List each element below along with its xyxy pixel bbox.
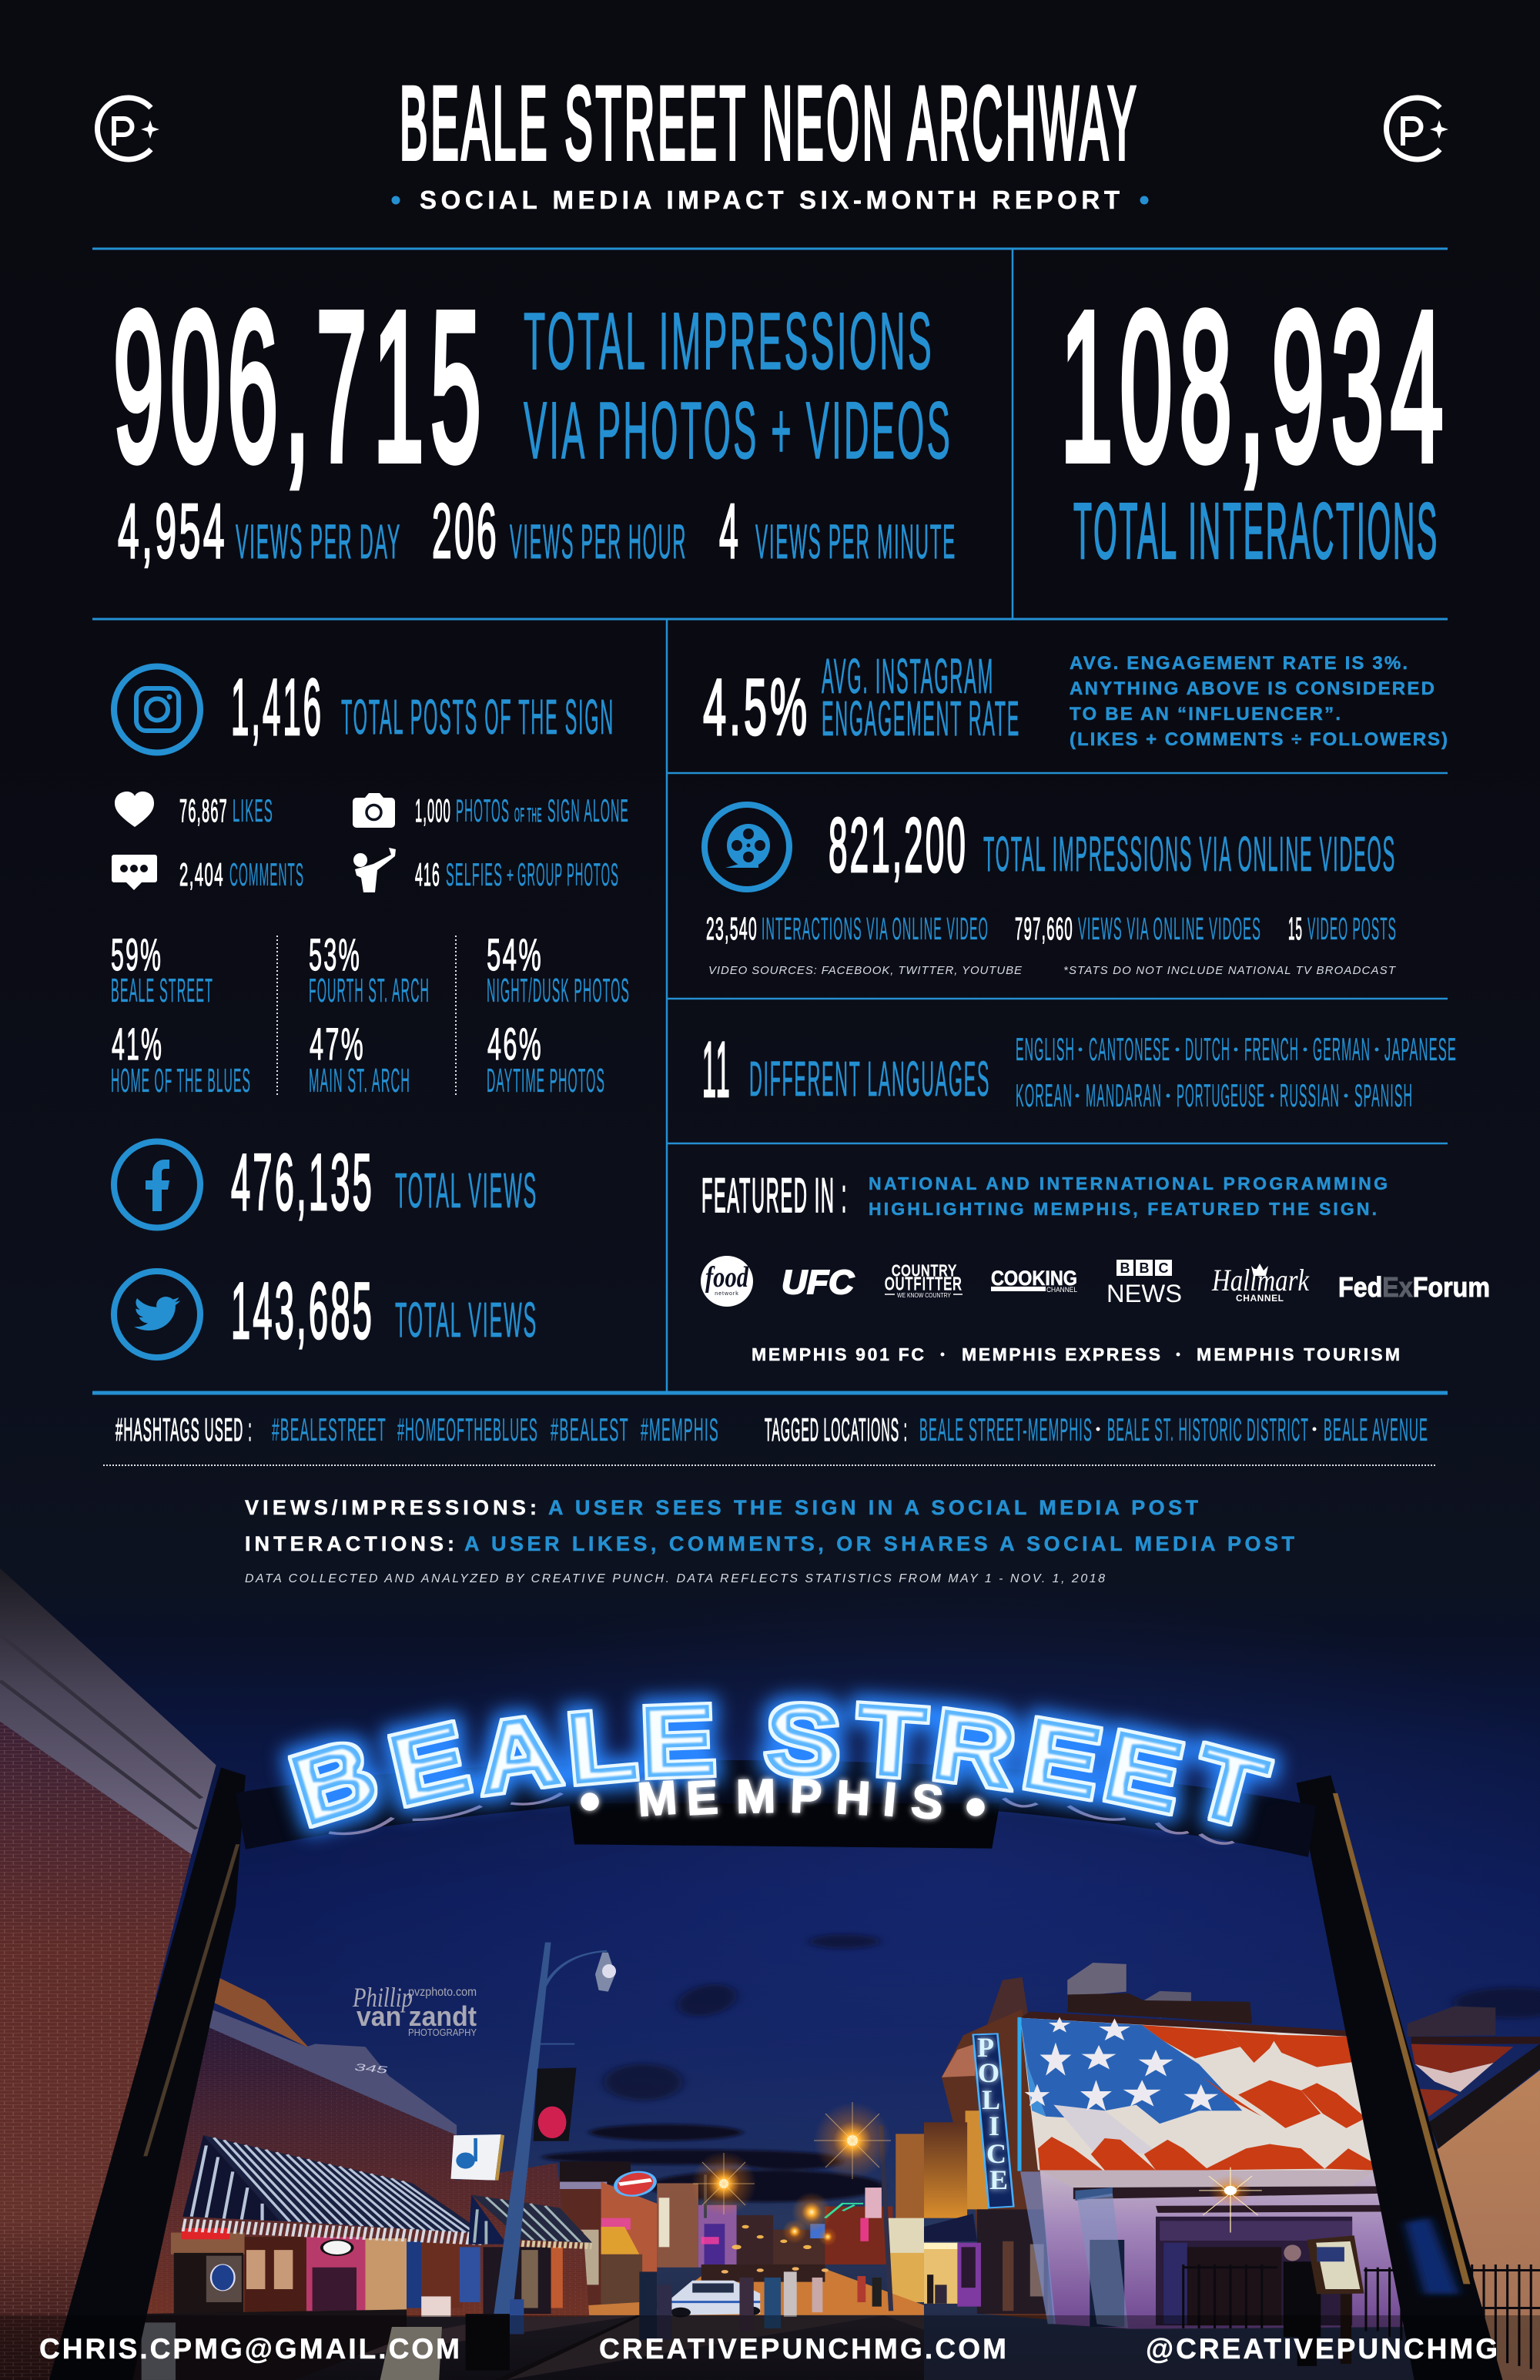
stat: views via online videos xyxy=(1015,911,1261,946)
panel: definitions xyxy=(245,1496,1294,1585)
percentage column: time of day xyxy=(487,930,630,1100)
neon sign: BEALE STREET: L xyxy=(563,1688,640,1804)
stat: total posts: 1,416 xyxy=(231,663,323,752)
note: engagement explanation: (LIKES + COMMENTS ÷ FOLLOWERS) xyxy=(1070,729,1448,750)
footer contact: email: CHRIS.CPMG@GMAIL.COM xyxy=(39,2333,460,2365)
text: local partners xyxy=(752,1344,1400,1364)
logo: BBC News: B xyxy=(1140,1260,1149,1276)
language list line one: CANTONESE xyxy=(1089,1031,1170,1067)
panel: online videos: 821,200 xyxy=(829,802,968,889)
police sign letters xyxy=(977,2032,1008,2195)
logo: FedExForum: FedExForum xyxy=(1338,1271,1490,1303)
note: data source: DATA COLLECTED AND ANALYZED BY CREATIVE PUNCH. DATA REFLECTS STATISTICS FROM MAY 1 - NOV. 1, 2018 xyxy=(245,1572,1105,1585)
neon sign: MEMPHIS xyxy=(581,1769,984,1830)
subtitle: SOCIAL MEDIA IMPACT SIX-MONTH REPORT xyxy=(420,186,1120,214)
definition: views and impressions xyxy=(245,1496,1198,1519)
logo: Cooking Channel: COOKING xyxy=(991,1267,1077,1290)
photographer watermark: van zandt xyxy=(357,2000,477,2032)
percentage column: location share: 41% xyxy=(112,1019,163,1069)
footer band xyxy=(0,2315,1540,2380)
mid street buildings xyxy=(554,2134,924,2308)
icon: heart xyxy=(115,792,154,827)
language list line two xyxy=(1016,1077,1413,1113)
stat: photos of the sign alone xyxy=(415,792,629,828)
bar sign xyxy=(450,2134,504,2181)
definition: interactions: A USER LIKES, COMMENTS, OR SHARES A SOCIAL MEDIA POST xyxy=(464,1532,1294,1555)
police sign letters: P xyxy=(977,2032,994,2063)
panel: instagram and social totals: TOTAL VIEWS xyxy=(395,1292,537,1347)
logo: BBC News: C xyxy=(1158,1260,1169,1276)
police car xyxy=(671,2281,760,2318)
footer contact: handle: @CREATIVEPUNCHMG xyxy=(1146,2333,1498,2365)
right tan wall xyxy=(1429,2044,1540,2380)
percentage column: time of day: 46% xyxy=(487,1019,543,1069)
police sign board xyxy=(973,2017,1056,2324)
logo: BBC News: NEWS xyxy=(1106,1280,1182,1307)
panel: engagement rate: AVG. INSTAGRAM xyxy=(822,648,994,704)
language list line one xyxy=(1016,1031,1457,1067)
light star on wall xyxy=(1199,2167,1262,2233)
panel: online videos xyxy=(705,802,1397,977)
panel: featured in: FEATURED IN : xyxy=(701,1169,848,1223)
note: engagement explanation xyxy=(1070,653,1448,750)
stat: views per hour: 206 xyxy=(432,488,499,574)
neon sign: BEALE STREET: E xyxy=(639,1684,717,1797)
logo: Country Outfitter xyxy=(885,1263,962,1299)
photographer watermark: pvzphoto.com xyxy=(408,1986,477,1999)
text: GROUP PHOTOS xyxy=(517,856,619,892)
percentage column: arch share: 47% xyxy=(310,1019,365,1069)
panel: instagram and social totals: BEALE STREET xyxy=(111,972,213,1009)
panel: languages: 11 xyxy=(702,1026,732,1113)
text: programming note: HIGHLIGHTING MEMPHIS, FEATURED THE SIGN. xyxy=(869,1199,1377,1219)
panel: hashtags and tagged locations xyxy=(116,1411,1428,1448)
street lights xyxy=(705,2125,891,2311)
panel: engagement rate: ENGAGEMENT RATE xyxy=(822,691,1020,746)
text: SIGN ALONE xyxy=(547,792,629,828)
text: local partners: MEMPHIS EXPRESS xyxy=(962,1344,1160,1364)
stat: photos of the sign alone: PHOTOS xyxy=(456,792,510,828)
police sign letters: I xyxy=(989,2111,999,2141)
note: video sources: VIDEO SOURCES: FACEBOOK, TWITTER, YOUTUBE xyxy=(708,964,1023,977)
stat: photos of the sign alone: 1,000 xyxy=(415,792,451,828)
brick building beside flag xyxy=(942,2009,1050,2320)
logo: food network: network xyxy=(715,1291,739,1297)
logo: food network xyxy=(701,1256,753,1307)
stat: comments: 2,404 xyxy=(179,856,224,892)
logo: Country Outfitter: OUTFITTER xyxy=(885,1274,962,1294)
text: VIEWS PER MINUTE xyxy=(755,515,956,569)
text: TOTAL IMPRESSIONS xyxy=(524,296,934,387)
icon: twitter xyxy=(114,1271,200,1357)
text: local partners: MEMPHIS TOURISM xyxy=(1197,1344,1400,1364)
language list line two: RUSSIAN xyxy=(1280,1077,1340,1113)
stat: interactions via online video xyxy=(706,911,989,946)
panel: online videos: VIEWS VIA ONLINE VIDOES xyxy=(1078,911,1261,946)
panel: instagram and social totals xyxy=(111,663,630,1357)
language list line one: ENGLISH xyxy=(1016,1031,1075,1067)
hashtags: #BEALEST xyxy=(551,1411,629,1448)
panel: total impressions: 906,715 xyxy=(113,268,487,505)
panel: languages: SPANISH xyxy=(1354,1077,1413,1113)
text: TOTAL POSTS OF THE SIGN xyxy=(341,689,614,745)
text: programming note: NATIONAL AND INTERNATIONAL PROGRAMMING xyxy=(869,1173,1388,1193)
panel: total impressions: VIEWS PER HOUR xyxy=(510,515,687,569)
sidewalk objects xyxy=(142,2296,524,2380)
heading: avg instagram engagement rate xyxy=(822,648,1020,746)
stat: views per day: 4,954 xyxy=(118,488,227,574)
definition: views and impressions: A USER SEES THE SIGN IN A SOCIAL MEDIA POST xyxy=(548,1496,1198,1519)
logo: BBC News xyxy=(1106,1260,1182,1307)
pedestrians xyxy=(639,2271,882,2340)
lights and glows xyxy=(602,1964,891,2246)
logo right xyxy=(1386,98,1448,159)
stat: video posts xyxy=(1288,911,1397,946)
panel: total interactions xyxy=(1060,268,1450,575)
neon sign: BEALE STREET: E xyxy=(1096,1709,1191,1833)
hashtags xyxy=(116,1411,719,1448)
panel: instagram and social totals: HOME OF THE BLUES xyxy=(111,1062,251,1100)
text: DAYTIME PHOTOS xyxy=(487,1062,605,1100)
neon sign: BEALE STREET: S xyxy=(764,1683,842,1796)
lavender building wall xyxy=(1040,2170,1411,2329)
stat: views per minute: 4 xyxy=(719,488,741,574)
arch bar and plaque xyxy=(236,1760,1316,1857)
neighbouring marquee xyxy=(924,2122,981,2307)
striped awnings xyxy=(182,2135,592,2246)
neon sign: MEMPHIS: M xyxy=(735,1770,776,1823)
neon sign: MEMPHIS: E xyxy=(685,1771,719,1826)
neon sign: MEMPHIS: H xyxy=(835,1771,872,1826)
note: stats exclusion: *STATS DO NOT INCLUDE NATIONAL TV BROADCAST xyxy=(1063,964,1397,977)
footer contact: website: CREATIVEPUNCHMG.COM xyxy=(599,2333,1006,2365)
neon sign: BEALE STREET: B xyxy=(280,1717,389,1846)
neon sign: BEALE STREET xyxy=(280,1683,1277,1849)
note: engagement explanation: ANYTHING ABOVE IS CONSIDERED xyxy=(1070,678,1435,699)
stat: 4.5%: 4.5% xyxy=(703,663,810,752)
panel: languages: DIFFERENT LANGUAGES xyxy=(749,1051,990,1106)
icon: comment bubble xyxy=(112,855,157,890)
second brick building xyxy=(136,1974,589,2317)
stat: interactions via online video: 23,540 xyxy=(706,911,758,946)
flag building and right side xyxy=(924,1963,1540,2380)
neon sign: BEALE STREET: E xyxy=(380,1702,477,1826)
definition: views and impressions: VIEWS/IMPRESSIONS: xyxy=(245,1496,537,1519)
icon: film reel xyxy=(705,805,789,889)
stat: selfies and group photos: 416 xyxy=(415,856,440,892)
percentage column: location share xyxy=(111,930,251,1100)
photographer watermark: PHOTOGRAPHY xyxy=(408,2027,477,2038)
neon sign: BEALE STREET: R xyxy=(927,1689,1022,1809)
percentage column: location share: 59% xyxy=(111,930,162,980)
panel: instagram and social totals: TOTAL VIEWS xyxy=(395,1163,537,1218)
photographer watermark: Phillip xyxy=(352,1982,413,2013)
stat: views via online videos: 797,660 xyxy=(1015,911,1073,946)
person, info board and fence xyxy=(1183,2235,1540,2369)
logo: Cooking Channel: CHANNEL xyxy=(1046,1286,1077,1294)
stat: photos of the sign alone: OF THE xyxy=(514,805,542,826)
neon sign: BEALE STREET: T xyxy=(853,1683,929,1798)
stat: facebook views: 476,135 xyxy=(231,1138,374,1227)
street scene left (awnings, storefronts, road) xyxy=(0,1943,924,2380)
second brick building: 345 xyxy=(353,2061,390,2076)
percentage column: arch share xyxy=(309,930,430,1100)
language list line one: FRENCH xyxy=(1244,1031,1299,1067)
logo: Country Outfitter: WE KNOW COUNTRY xyxy=(897,1292,952,1299)
stat: total posts xyxy=(231,663,614,752)
icon: instagram xyxy=(114,667,200,753)
icon: camera xyxy=(353,793,395,828)
note: engagement explanation: AVG. ENGAGEMENT RATE IS 3%. xyxy=(1070,653,1408,674)
panel: total impressions: VIEWS PER DAY xyxy=(236,515,401,569)
text: local partners: MEMPHIS 901 FC xyxy=(752,1344,924,1364)
panel: instagram and social totals: MAIN ST. ARCH xyxy=(309,1062,410,1100)
stat: views per minute xyxy=(719,488,956,574)
rooftop units xyxy=(987,1963,1540,2044)
panel: instagram and social totals: LIKES xyxy=(233,792,273,828)
tagged locations xyxy=(765,1411,1428,1448)
panel: hashtags and tagged locations: #MEMPHIS xyxy=(641,1411,719,1448)
text: programming note xyxy=(869,1173,1388,1219)
street lamp and banner xyxy=(494,1943,615,2314)
neon sign: MEMPHIS: P xyxy=(789,1769,823,1824)
language list line two: MANDARAN xyxy=(1086,1077,1162,1113)
panel: featured in xyxy=(701,1169,1490,1364)
neon sign: MEMPHIS: I xyxy=(881,1772,899,1827)
logo: food network: food xyxy=(705,1261,749,1294)
language list line one: DUTCH xyxy=(1185,1031,1230,1067)
storefronts xyxy=(112,2228,563,2380)
icon: selfie xyxy=(353,848,396,892)
neon sign: MEMPHIS: M xyxy=(635,1771,679,1827)
stat: selfies and group photos: + xyxy=(507,863,514,887)
language list line one: GERMAN xyxy=(1313,1031,1371,1067)
hashtags: #HASHTAGS USED : xyxy=(116,1411,253,1448)
language list line two: PORTUGEUSE xyxy=(1177,1077,1265,1113)
left brick wall xyxy=(0,1568,216,2380)
icon: facebook xyxy=(114,1141,200,1227)
photo: Beale Street neon arch at dusk xyxy=(0,1568,1540,2380)
percentage column: arch share: 53% xyxy=(309,930,361,980)
neon sign: BEALE STREET: T xyxy=(1182,1724,1277,1849)
stat: selfies and group photos: SELFIES xyxy=(446,856,503,892)
panel: online videos: INTERACTIONS VIA ONLINE VIDEO xyxy=(762,911,989,946)
hashtags: #BEALESTREET xyxy=(272,1411,387,1448)
panel: instagram and social totals: FOURTH ST. ARCH xyxy=(309,972,430,1009)
stat: twitter views: 143,685 xyxy=(231,1267,374,1356)
stat: video posts: 15 xyxy=(1288,911,1303,946)
panel: engagement rate xyxy=(703,648,1448,752)
percentage column: time of day: 54% xyxy=(487,930,543,980)
logo: BBC News: B xyxy=(1120,1260,1130,1276)
text: VIDEO POSTS xyxy=(1307,911,1397,946)
text: VIA PHOTOS + VIDEOS xyxy=(524,386,952,476)
logo left xyxy=(97,98,159,159)
language list line two: KOREAN xyxy=(1016,1077,1073,1113)
panel: instagram and social totals: COMMENTS xyxy=(229,856,304,892)
logo: Country Outfitter: COUNTRY xyxy=(892,1263,957,1280)
neon sign: BEALE STREET: E xyxy=(1016,1697,1109,1819)
hashtags: #HOMEOFTHEBLUES xyxy=(397,1411,538,1448)
neon sign: BEALE STREET: A xyxy=(470,1694,565,1814)
text: NIGHT/DUSK PHOTOS xyxy=(487,972,630,1009)
horizon clouds xyxy=(542,2124,884,2202)
panel: languages xyxy=(702,1026,1457,1113)
logo: Hallmark Channel: CHANNEL xyxy=(1236,1293,1284,1304)
police sign letters: L xyxy=(982,2084,1000,2115)
photographer watermark xyxy=(352,1982,477,2038)
tagged locations: BEALE STREET-MEMPHIS xyxy=(919,1411,1093,1448)
note: engagement explanation: TO BE AN “INFLUENCER”. xyxy=(1070,704,1341,725)
police sign letters: O xyxy=(978,2057,999,2088)
neon sign: MEMPHIS: S xyxy=(909,1774,946,1830)
logo: UFC: UFC xyxy=(782,1264,855,1301)
lit road xyxy=(0,2265,924,2380)
logo: Hallmark Channel: Hallmark xyxy=(1211,1263,1310,1297)
sky xyxy=(0,1578,1540,2380)
stat: views per hour xyxy=(432,488,687,574)
police sign letters: E xyxy=(989,2164,1008,2195)
arch posts xyxy=(49,1768,1503,2380)
american flag mural xyxy=(1020,2011,1513,2170)
stat: likes: 76,867 xyxy=(179,792,228,828)
header xyxy=(97,66,1448,214)
definition: interactions: INTERACTIONS: xyxy=(245,1532,454,1555)
police sign letters: C xyxy=(986,2138,1006,2169)
tagged locations: TAGGED LOCATIONS : xyxy=(765,1411,908,1448)
